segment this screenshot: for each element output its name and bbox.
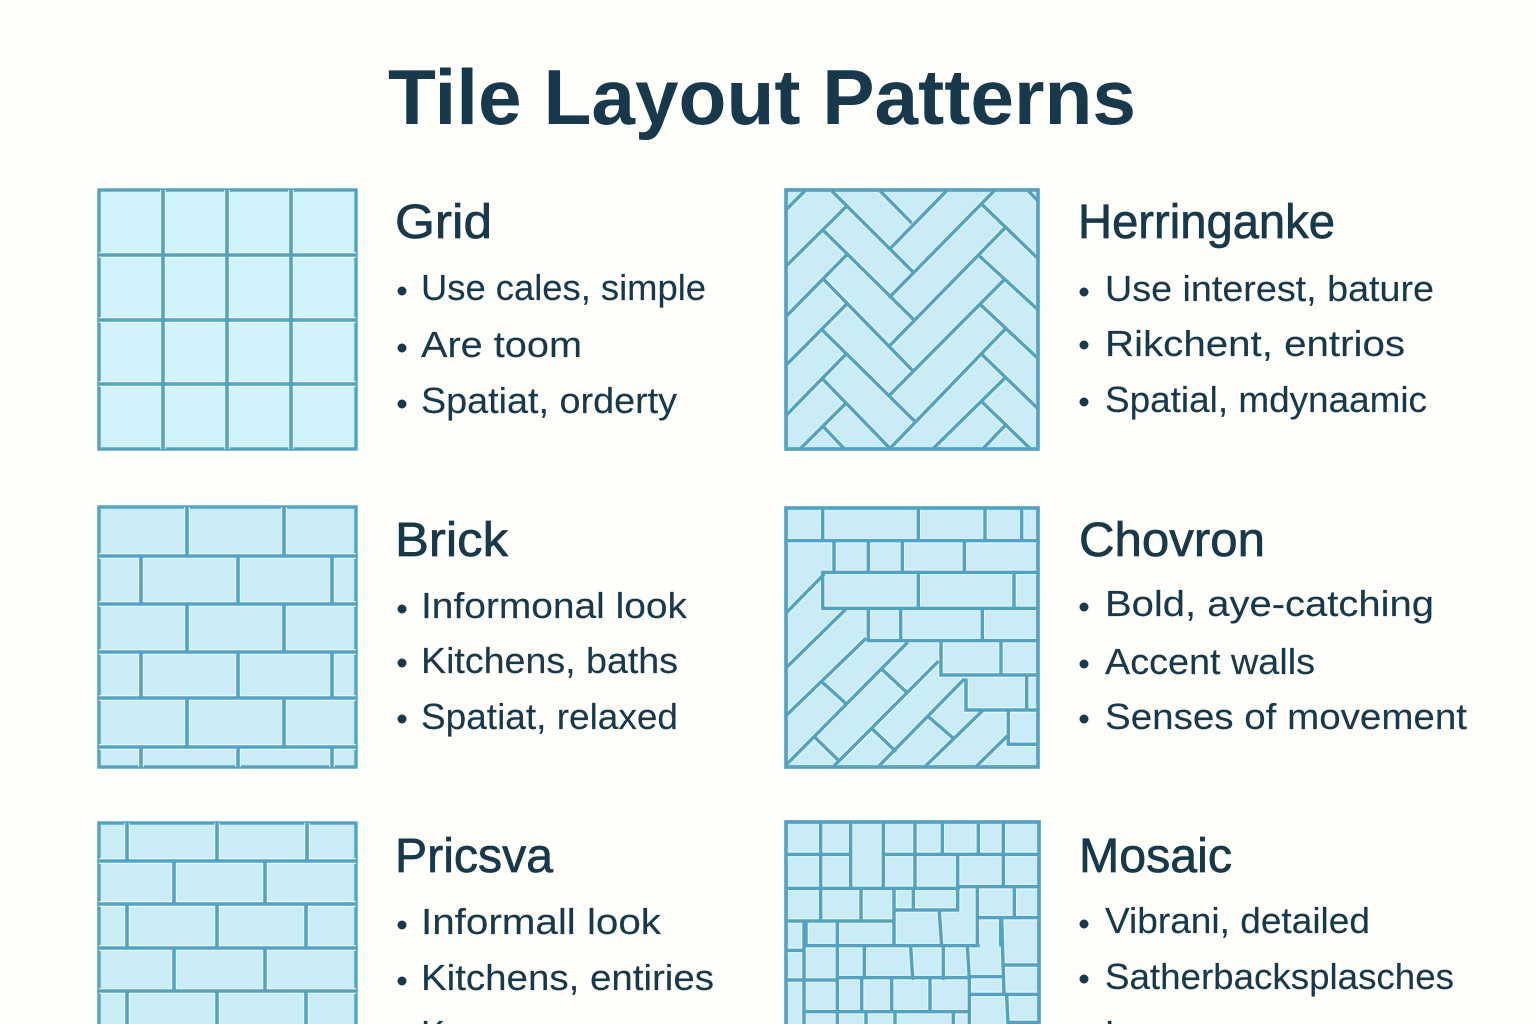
heading: pricsva: Pricsva	[395, 830, 553, 883]
heading: chevron: Chovron	[1079, 514, 1265, 567]
panel: chevron	[786, 508, 1467, 767]
list: pricsva: Kitchens, entiries	[421, 957, 714, 998]
list: grid: Spatiat, orderty	[421, 380, 677, 421]
list: grid	[398, 267, 706, 421]
heading: mosaic: Mosaic	[1079, 830, 1232, 883]
panel: herringbone	[786, 190, 1434, 449]
panel: brick	[99, 507, 688, 767]
list: brick: Spatiat, relaxed	[421, 696, 678, 737]
heading: herringbone: Herringanke	[1078, 196, 1335, 249]
list: chevron: Accent walls	[1105, 641, 1315, 682]
list: herringbone: Use interest, bature	[1105, 268, 1434, 309]
list: herringbone: Spatial, mdynaamic	[1105, 379, 1427, 420]
list: pricsva: Informall look	[421, 901, 662, 942]
list: chevron	[1080, 583, 1467, 737]
pattern: offset brick tiles	[99, 823, 356, 1024]
pattern: herringbone tiles	[786, 190, 1038, 449]
list: herringbone	[1080, 268, 1434, 420]
list: chevron: Senses of movement	[1105, 696, 1467, 737]
heading: grid: Grid	[395, 196, 492, 249]
list: pricsva	[398, 901, 714, 1024]
list: grid: Use cales, simple	[421, 267, 706, 308]
pattern: chevron tiles	[786, 508, 1038, 767]
pattern: mosaic tiles	[785, 822, 1040, 1024]
list: herringbone: Rikchent, entrios	[1105, 323, 1405, 364]
pattern: brick tiles	[99, 507, 356, 767]
panel: mosaic	[785, 822, 1454, 1024]
list: brick	[398, 585, 688, 737]
list: mosaic: Satherbacksplasches	[1105, 956, 1454, 997]
panel: grid	[99, 190, 706, 449]
title: Tile Layout Patterns	[388, 53, 1136, 141]
list: brick: Kitchens, baths	[421, 640, 678, 681]
list: mosaic: Vibrani, detailed	[1105, 900, 1370, 941]
heading: brick: Brick	[395, 514, 509, 567]
list: brick: Informonal look	[421, 585, 688, 626]
panel: pricsva	[99, 823, 714, 1024]
list: chevron: Bold, aye-catching	[1105, 583, 1434, 624]
list: grid: Are toom	[421, 324, 582, 365]
pattern: grid tiles	[99, 190, 356, 449]
list: mosaic	[1080, 900, 1454, 1024]
